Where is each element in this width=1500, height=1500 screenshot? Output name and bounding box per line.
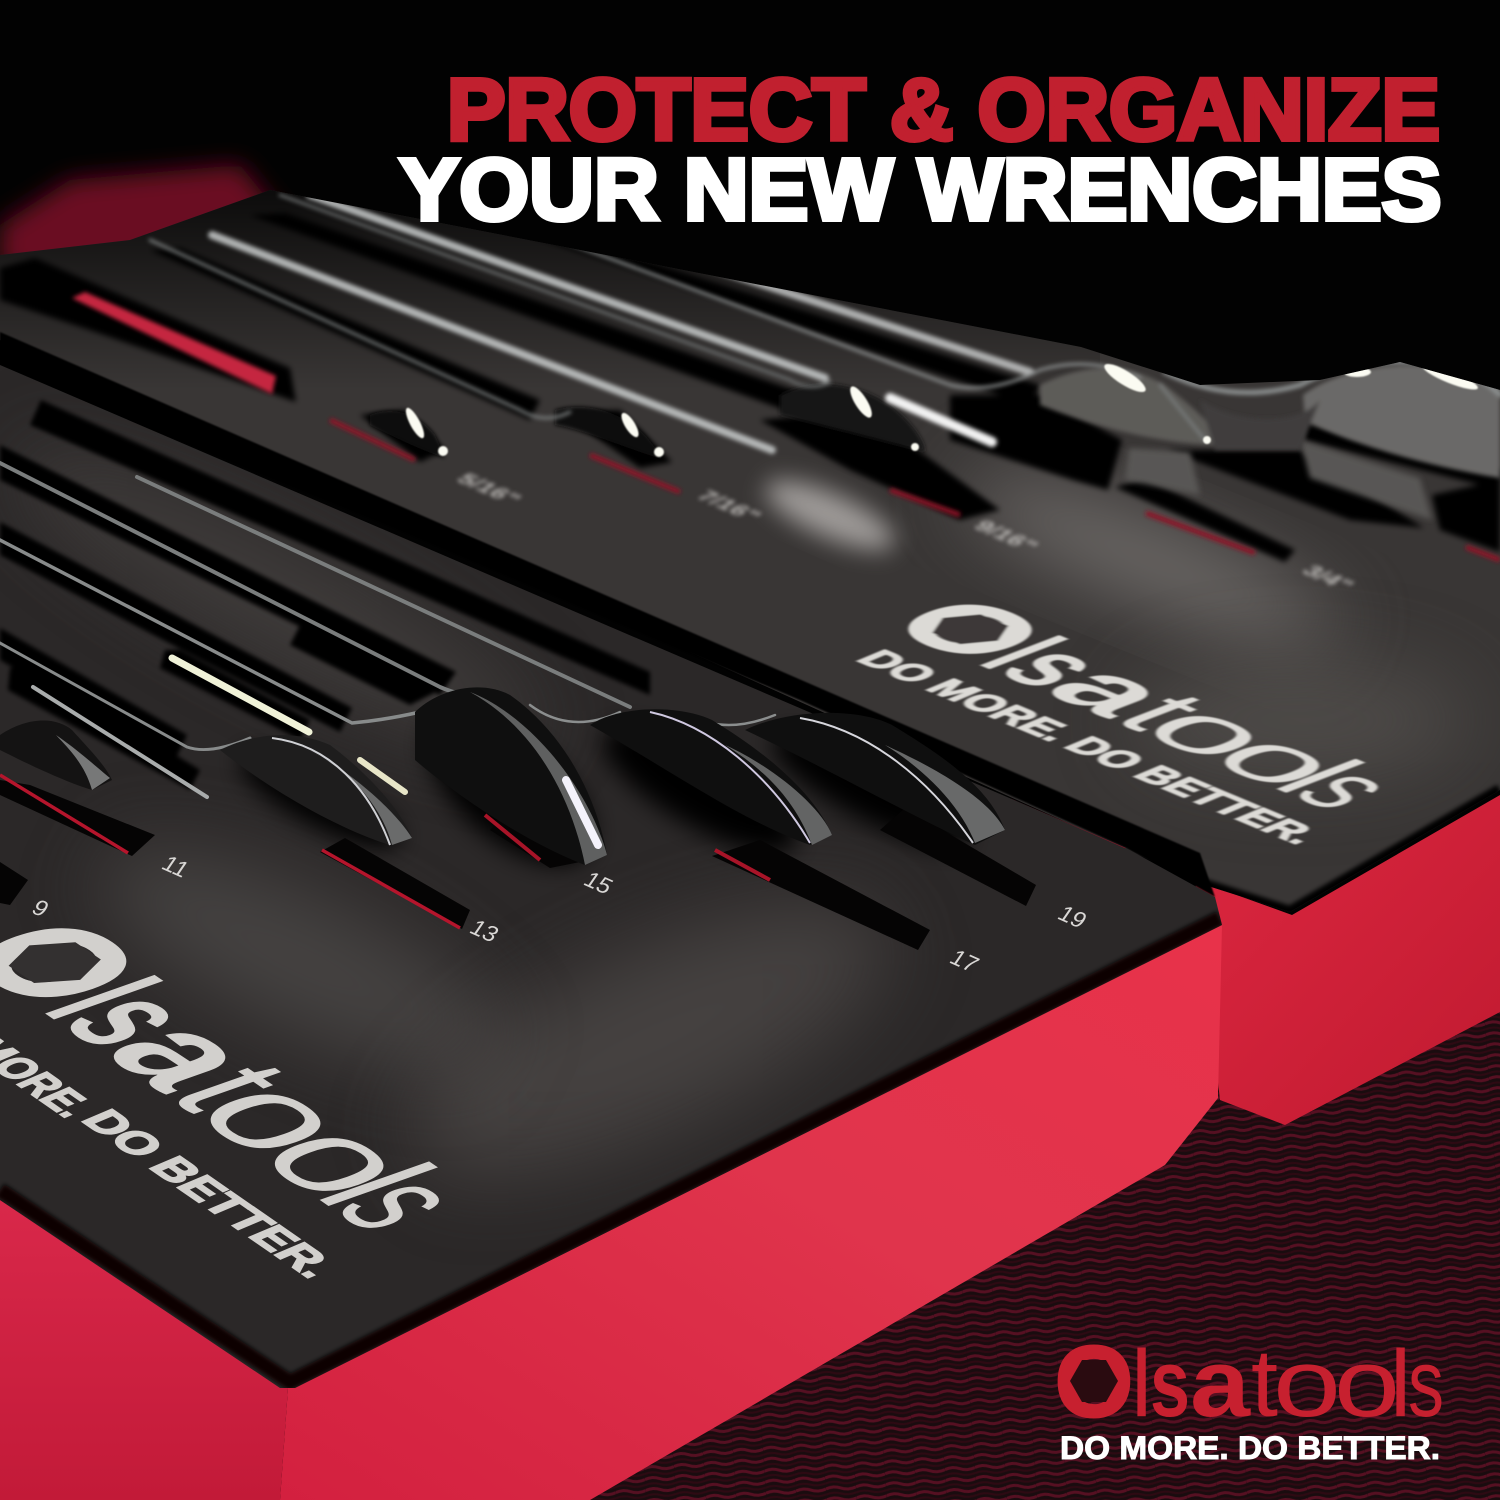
rear tray red foam side [1195, 795, 1500, 1125]
rear tray size labels: 9/16" [968, 517, 1044, 554]
logo wordmark [1055, 1326, 1444, 1438]
size 15: 15 [579, 867, 618, 899]
rear tray grey foam blocks [1125, 440, 1432, 520]
rear tray printed tagline: DO MORE. DO BETTER. [847, 645, 1334, 849]
logo wordmark: t [1251, 1330, 1278, 1437]
rear tray size labels: 5/16" [451, 470, 527, 507]
front tray surface lighting and details [0, 400, 1220, 1382]
slot 13 red liner [322, 850, 460, 928]
logo wordmark: a [1190, 1330, 1251, 1437]
logo tagline: DO MORE. DO BETTER. [1060, 1430, 1440, 1466]
fabric work surface [560, 980, 1500, 1500]
rear tray red slot glimpses [330, 420, 1500, 560]
rear tray size labels: 3/4" [1296, 562, 1360, 593]
head shadows [234, 731, 972, 874]
rear tray wrench shanks [150, 195, 1500, 450]
front tray red foam long side [280, 925, 1222, 1500]
rear tray printed logo: s [970, 634, 1139, 700]
logo wordmark: l [1390, 1331, 1411, 1437]
front tray printed logo: l [280, 1147, 471, 1222]
slot 13 [320, 838, 470, 929]
panel: front wrench tray (metric) [0, 365, 1222, 1500]
rear tray bevel shadow [1205, 790, 1500, 912]
rear tray printed logo: o [1181, 721, 1379, 800]
rear tray dark slots [0, 213, 1500, 562]
front tray red foam short side [0, 1200, 288, 1500]
front tray printed logo: a [68, 1003, 302, 1107]
wrench head 13 [220, 735, 412, 845]
logo wordmark: l [1131, 1331, 1152, 1437]
rear tray size labels [451, 470, 1360, 593]
slot 11 red liner [0, 775, 128, 853]
title line 1: PROTECT & ORGANIZE [447, 62, 1440, 158]
rear tray size labels: 7/16" [691, 487, 767, 524]
slot red glimpses [484, 814, 771, 882]
rear tray printed logo: s [1265, 757, 1429, 821]
size 13: 13 [465, 915, 504, 947]
rear tray printed logo: l [949, 625, 1095, 681]
wrench head 15 [415, 687, 607, 865]
rear tray black top surface [0, 190, 1500, 912]
brand logo [1055, 1326, 1444, 1466]
slot 9 [0, 862, 28, 905]
front tray printed logo: s [26, 974, 238, 1063]
front tray black top surface [0, 365, 1222, 1388]
size 17: 17 [945, 945, 984, 977]
front tray printed logo: o [156, 1063, 398, 1172]
title [400, 62, 1442, 238]
rear tray printed logo: o [1111, 692, 1312, 772]
rear tray printed logo: a [1016, 653, 1208, 729]
rear tray printed logo [860, 587, 1434, 821]
wrench head 11 [0, 720, 112, 790]
gap shadow between trays [0, 332, 1215, 897]
logo wordmark: s [1150, 1330, 1190, 1437]
front tray printed logo [0, 903, 515, 1246]
front tray wrench shanks [0, 463, 775, 797]
front tray printed logo: o [221, 1107, 460, 1214]
logo wordmark: o [1334, 1330, 1400, 1437]
red far-edge glimpse [1011, 797, 1126, 847]
title line 2: YOUR NEW WRENCHES [400, 142, 1442, 238]
front tray printed logo: s [299, 1160, 507, 1246]
front tray printed tagline: DO BETTER. [71, 1104, 349, 1283]
rear tray chrome highlights [403, 359, 1480, 457]
rear tray red slot [72, 292, 276, 394]
size 9: 9 [27, 895, 54, 921]
rear tray printed logo: l [1246, 748, 1392, 805]
logo wordmark: o [1273, 1330, 1341, 1437]
front tray printed logo: t [133, 1047, 331, 1126]
rear tray wrench heads [370, 365, 1500, 478]
slot 15 [510, 842, 578, 868]
rear tray printed logo: t [1086, 682, 1239, 742]
front tray upper slot bands [0, 400, 650, 790]
size numbers [27, 851, 1092, 977]
size 11: 11 [157, 851, 194, 882]
front tray near edge shadow [0, 918, 1220, 1382]
logo wordmark: s [1408, 1330, 1444, 1437]
rear tray printed logo: O [860, 587, 1078, 673]
slot 17 [712, 840, 930, 950]
size 19: 19 [1053, 901, 1092, 933]
front tray printed tagline [0, 994, 349, 1283]
slot 11 [0, 780, 155, 856]
blurred red foam at the far end [0, 165, 300, 290]
wrench head 19 [745, 713, 1005, 845]
slot 19 [880, 824, 1036, 906]
rear tray surface lighting and details [0, 175, 1500, 912]
front tray printed logo: l [5, 961, 197, 1036]
logo wordmark: O [1055, 1326, 1133, 1438]
wrench head 17 [590, 709, 832, 845]
